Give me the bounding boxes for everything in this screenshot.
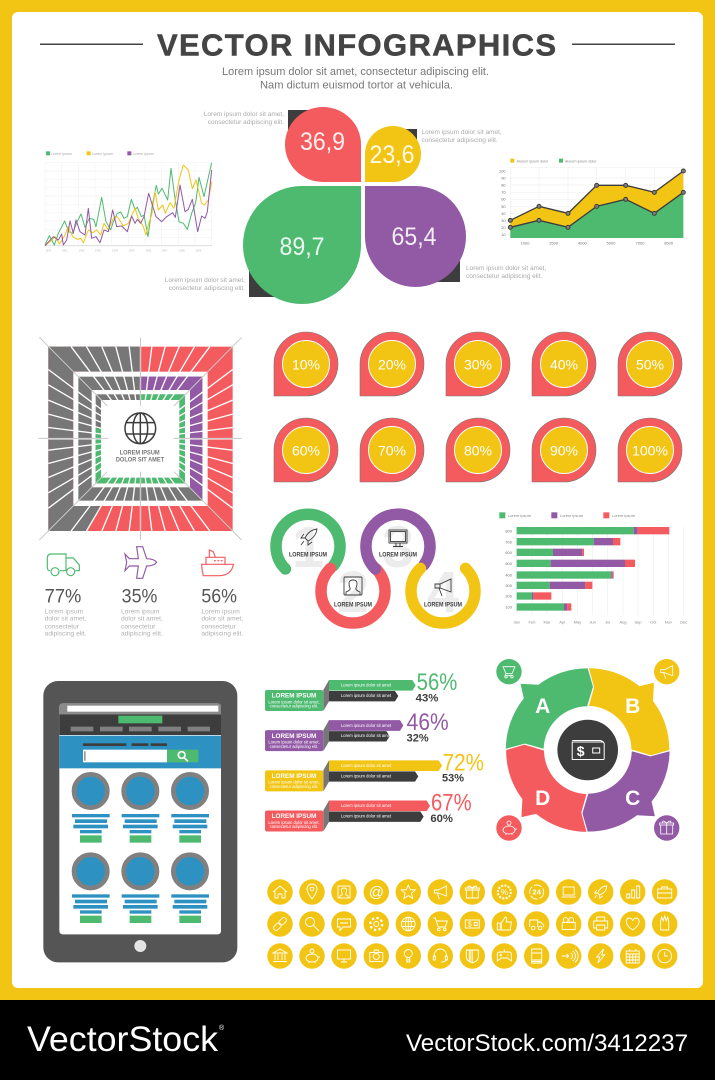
petal chart: [165, 107, 546, 304]
axis labels: 1992: [79, 248, 85, 252]
row 4: [265, 789, 472, 831]
area chart: 4000: [578, 241, 588, 246]
legend: Lorem ipsum: [92, 152, 113, 156]
icon: gear: [364, 911, 389, 937]
axis labels: 800: [505, 528, 513, 533]
pin 80%: 80%: [464, 442, 492, 458]
icon: megaphone: [428, 879, 453, 905]
stat: 56%: adipiscing elit.: [201, 631, 243, 638]
subtitle: [222, 66, 489, 92]
icon: truck: [47, 554, 79, 576]
axis labels: 700: [505, 539, 513, 544]
icon: headset: [428, 943, 453, 969]
ring labels: LOREM IPSUM: [379, 552, 417, 558]
row 4: LOREM IPSUM: [272, 813, 316, 820]
pin 20%: [360, 332, 424, 396]
row 2: [265, 709, 449, 751]
row 4: Lorem ipsum dolor sit amet,: [268, 820, 320, 825]
row 4: 67%: [431, 789, 472, 816]
ring labels: LOREM IPSUM: [424, 602, 462, 608]
icon: thumbs up: [492, 911, 517, 937]
row 1: [265, 669, 457, 711]
background digits: [292, 515, 459, 625]
axis labels: 600: [505, 550, 513, 555]
icon: star: [396, 879, 421, 905]
stacked bar chart: [499, 512, 687, 625]
pin 60%: [274, 418, 338, 482]
product card: [122, 855, 159, 923]
footer band: [0, 1000, 715, 1080]
pin 90%: [532, 418, 596, 482]
petal: purple 65,4: [365, 186, 466, 287]
row 3: Lorem ipsum dolor sit amet: [341, 763, 392, 768]
petal: yellow 23,6: [365, 126, 421, 182]
icon: arrow waves: [556, 943, 581, 969]
pin 50%: [618, 332, 682, 396]
icon: lightning bolt: [588, 943, 613, 969]
segment letters: C: [625, 787, 640, 810]
legend: Alorem ipsum dolor: [565, 159, 597, 163]
pin 30%: 30%: [464, 356, 492, 372]
center label: DOLOR SIT AMET: [116, 457, 164, 464]
legend: Alorem ipsum dolor: [517, 159, 549, 163]
percent pins: [274, 332, 682, 482]
callout: green: Lorem ipsum dolor sit amet,: [165, 277, 245, 284]
row 2: 46%: [407, 709, 449, 736]
row 3: Lorem ipsum dolor sit amet,: [268, 780, 320, 785]
legend: [510, 159, 597, 163]
pin 100%: [618, 418, 682, 482]
area chart: 2500: [549, 241, 559, 246]
icon: shield: [460, 943, 485, 969]
axis labels: 40: [501, 211, 506, 216]
row 4: Lorem ipsum dolor sit amet: [341, 803, 392, 808]
subtitle: Lorem ipsum dolor sit amet, consectetur adipiscing elit.: [222, 66, 489, 78]
row 2: Lorem ipsum dolor sit amet: [341, 723, 392, 728]
subtitle: Nam dictum euismod tortor at vehicula.: [260, 80, 453, 92]
ring 2: [321, 568, 385, 623]
icon: gift: [460, 879, 485, 905]
stat: 35%: dolor sit amet,: [121, 616, 163, 623]
progress bars: [265, 669, 484, 831]
icon: megaphone: [435, 579, 451, 596]
icon: clock: [652, 943, 677, 969]
icon: briefcase: [652, 879, 677, 905]
area chart: 1000: [521, 241, 530, 246]
row 1: consectetur adipiscing elit.: [270, 704, 318, 709]
segment A: [505, 668, 593, 749]
pin 100%: 100%: [632, 442, 668, 458]
axis labels: 100: [499, 169, 506, 174]
background digits: 3: [382, 515, 414, 580]
icon: monitor: [389, 530, 407, 546]
pin 40%: 40%: [550, 356, 578, 372]
row 4: Lorem ipsum dolor sit amet: [341, 813, 392, 818]
petal: yellow 23,6: 23,6: [370, 141, 414, 169]
stacked bar chart: Sep: [634, 620, 642, 625]
segment B: [588, 668, 670, 756]
axis labels: 10: [501, 232, 506, 237]
footer url: VectorStock.com/3412237: [406, 1030, 688, 1057]
axis labels: 50: [501, 204, 506, 209]
callout: yellow: [422, 129, 502, 144]
ring 1: [276, 514, 340, 569]
area chart: 5000: [607, 241, 616, 246]
icon: person: [344, 577, 362, 595]
callout: yellow: consectetur adipiscing elit.: [422, 137, 498, 144]
stat: 77%: Lorem ipsum: [45, 608, 84, 615]
axis labels: 80: [501, 183, 506, 188]
green area: [510, 192, 683, 238]
row 1: LOREM IPSUM: [272, 693, 316, 700]
stat: 35%: adipiscing elit.: [121, 631, 163, 638]
axis labels: 1997: [162, 248, 168, 252]
axis labels: 300: [505, 583, 513, 588]
petal: red 36,9: 36,9: [300, 128, 345, 156]
legend: Lorem ipsum: [560, 513, 584, 518]
icon: heart: [620, 911, 645, 937]
icon: 24 hours: [524, 879, 549, 905]
axis labels: 1998: [179, 248, 185, 252]
icon: plane: [125, 547, 157, 578]
icon: rocket: [588, 879, 613, 905]
badge: cart: [496, 659, 522, 684]
icon: link: [267, 911, 293, 937]
icon: ship: [202, 550, 233, 576]
icon: money: $: [468, 922, 472, 928]
axis labels: 1999: [195, 248, 202, 252]
row 2: 32%: [407, 732, 429, 744]
callout: red: consectetur adipiscing elit.: [208, 119, 284, 126]
row 3: 53%: [442, 773, 464, 785]
transport stats: [45, 547, 243, 638]
row 3: LOREM IPSUM: [272, 773, 316, 780]
row 1: Lorem ipsum dolor sit amet: [341, 683, 392, 688]
stat: 77%: consectetur: [45, 623, 80, 630]
row 1: 56%: [417, 669, 457, 696]
icon: globe: [396, 911, 421, 937]
icon: at sign: @: [369, 884, 384, 901]
footer logo: VectorStock: [27, 1020, 219, 1059]
stat: 77%: adipiscing elit.: [45, 631, 87, 638]
stat: 35%: consectetur: [121, 623, 156, 630]
center label: LOREM IPSUM: [120, 450, 160, 457]
icon: 24 hours: 24: [533, 888, 542, 897]
pin 60%: 60%: [292, 442, 320, 458]
axis labels: 200: [505, 594, 513, 599]
stat: 56%: Lorem ipsum: [201, 608, 240, 615]
legend: Lorem ipsum: [51, 152, 72, 156]
product card: [171, 855, 209, 923]
icon: gamepad: [492, 943, 517, 969]
petal: purple 65,4: 65,4: [392, 223, 437, 251]
background digits: 2: [337, 560, 369, 625]
stacked bar chart: Feb: [529, 620, 536, 625]
pin 10%: [274, 332, 338, 396]
icon: search: [299, 911, 325, 937]
product card: [171, 774, 209, 843]
row 2: consectetur adipiscing elit.: [270, 744, 318, 749]
stat: 56%: consectetur: [201, 623, 237, 630]
pin 10%: 10%: [292, 356, 320, 372]
icon: at sign: [364, 879, 389, 905]
row 1: 43%: [416, 692, 438, 704]
pin 50%: 50%: [636, 356, 664, 372]
segment letters: A: [535, 695, 550, 718]
icon: rocket: [301, 529, 317, 545]
row 4: 60%: [430, 813, 453, 825]
row 2: Lorem ipsum dolor sit amet,: [268, 739, 320, 744]
segment letters: D: [535, 787, 550, 810]
badge: gift: [654, 815, 679, 841]
ring labels: LOREM IPSUM: [334, 602, 372, 608]
stacked bar chart: May: [574, 620, 581, 625]
stacked bar chart: Jul: [605, 620, 610, 625]
callout: green: consectetur adipiscing elit.: [169, 285, 245, 292]
icon: truck: [524, 911, 549, 937]
callout: red: [204, 111, 284, 126]
segment letters: [535, 695, 640, 810]
icon: piggy bank: [299, 943, 325, 969]
segment D: [506, 744, 587, 832]
stat: 56%: [201, 587, 243, 638]
stacked bar chart: Dec: [680, 620, 687, 625]
row 1: Lorem ipsum dolor sit amet,: [268, 699, 320, 704]
icon: wallet: $: [577, 743, 585, 759]
row 3: consectetur adipiscing elit.: [270, 784, 318, 789]
row 3: Lorem ipsum dolor sit amet: [341, 773, 392, 778]
icon: bank: [267, 943, 293, 969]
axis labels: 1991: [62, 248, 68, 252]
stacked bar chart: Apr: [559, 620, 566, 625]
bars: [517, 527, 669, 611]
stat: 77%: 77%: [45, 587, 81, 608]
axis labels: 90: [501, 176, 506, 181]
stat: 56%: dolor sit amet,: [201, 616, 243, 623]
icon: percent badge: %: [501, 888, 508, 897]
stacked bar chart: Jan: [513, 620, 520, 625]
callout: purple: Lorem ipsum dolor sit amet,: [466, 265, 546, 272]
pin 40%: [532, 332, 596, 396]
ring labels: [289, 552, 462, 608]
row 1: Lorem ipsum dolor sit amet: [341, 693, 392, 698]
icon: book: [524, 943, 549, 969]
legend: [499, 512, 636, 518]
callout: purple: consectetur adipiscing elit.: [466, 273, 542, 280]
pin 20%: 20%: [378, 356, 406, 372]
area chart: [499, 159, 685, 246]
icon: globe: [125, 413, 156, 444]
callout: yellow: Lorem ipsum dolor sit amet,: [422, 129, 502, 136]
axis labels: 400: [505, 573, 513, 578]
radial square diagram: [38, 337, 242, 540]
icon: video camera: [556, 911, 581, 937]
icon: monitor: [331, 943, 357, 969]
axis labels: 1995: [129, 248, 135, 252]
background digits: 1: [292, 515, 324, 580]
segment letters: B: [625, 695, 640, 718]
stat: 35%: 35%: [122, 587, 157, 608]
petal: red 36,9: [285, 107, 361, 182]
stacked bar chart: Oct: [650, 620, 657, 625]
pin 90%: 90%: [550, 442, 578, 458]
center label: [116, 450, 164, 464]
axis labels: 20: [501, 225, 506, 230]
row 2: LOREM IPSUM: [272, 733, 316, 740]
icon grid: [267, 879, 677, 969]
icon: pin: [299, 879, 325, 905]
axis labels: 1990: [45, 248, 52, 252]
yellow area: [510, 171, 683, 227]
stat: 35%: Lorem ipsum: [121, 608, 160, 615]
axis labels: [505, 528, 513, 610]
axis labels: [499, 169, 506, 237]
ring 4: [411, 568, 475, 623]
product card: [122, 774, 159, 843]
segment C: [582, 751, 670, 832]
axis labels: 500: [505, 561, 513, 566]
axis labels: 70: [501, 190, 506, 195]
title: VECTOR INFOGRAPHICS: [157, 28, 556, 62]
axis labels: 60: [501, 197, 506, 202]
series outline and markers: [508, 169, 685, 229]
pin 70%: 70%: [378, 442, 406, 458]
ring labels: LOREM IPSUM: [289, 552, 327, 558]
icon: cart: [428, 911, 453, 937]
stat: 77%: [45, 587, 87, 638]
axis labels: 100: [505, 605, 513, 610]
callout: red: Lorem ipsum dolor sit amet,: [204, 111, 284, 118]
axis labels: [45, 248, 202, 252]
area chart: 8500: [664, 241, 674, 246]
petal: green 89,7: [243, 186, 361, 304]
area chart: 7000: [636, 241, 645, 246]
stacked bar chart: Jun: [589, 620, 596, 625]
series lines: [45, 163, 212, 246]
icon: percent badge: [492, 879, 517, 905]
legend: Lorem ipsum: [612, 513, 636, 518]
stat: 77%: dolor sit amet,: [45, 616, 87, 623]
row 4: consectetur adipiscing elit.: [270, 824, 318, 829]
axis labels: 1996: [145, 248, 152, 252]
row 2: Lorem ipsum dolor sit amet: [341, 733, 392, 738]
icon: home: [267, 879, 293, 905]
icon: bars: [620, 879, 645, 905]
legend: [46, 151, 154, 156]
pin 70%: [360, 418, 424, 482]
cycle diagram: [496, 659, 679, 841]
icon: chat: [331, 911, 357, 937]
icon: person: [331, 879, 357, 905]
stacked bar chart: Mar: [544, 620, 551, 625]
stat: 35%: [121, 587, 163, 638]
axis labels: 30: [501, 218, 506, 223]
stat: 56%: 56%: [201, 587, 237, 608]
legend: Lorem ipsum: [133, 152, 154, 156]
callout: purple: [466, 265, 546, 280]
ring 3: [366, 514, 430, 569]
product card: [72, 855, 110, 923]
badge: megaphone: [654, 659, 679, 684]
axis labels: 1993: [95, 248, 101, 252]
footer band: ®: [219, 1024, 225, 1032]
row 3: 72%: [443, 749, 484, 776]
icon: hand: [652, 911, 677, 937]
icon: wallet: [572, 740, 604, 760]
petal: green 89,7: 89,7: [280, 233, 324, 261]
callout: green: [165, 277, 245, 292]
icon: printer: [588, 911, 613, 937]
pin 30%: [446, 332, 510, 396]
stacked bar chart: Aug: [619, 620, 627, 625]
icon: money: [460, 911, 485, 937]
product card: [72, 774, 110, 843]
icon: calendar: [620, 943, 645, 969]
background digits: 4: [427, 560, 459, 625]
legend: Lorem ipsum: [508, 513, 532, 518]
badge: piggy bank: [496, 815, 522, 841]
stacked bar chart: Nov: [665, 620, 672, 625]
icon: light bulb: [396, 943, 421, 969]
tablet mockup: [43, 681, 237, 962]
icon: camera: [364, 943, 389, 969]
linked rings: [276, 514, 475, 625]
axis labels: 1994: [112, 248, 118, 252]
pin 80%: [446, 418, 510, 482]
row 3: [265, 749, 484, 791]
line chart: [45, 151, 212, 252]
icon: laptop: [556, 879, 581, 905]
